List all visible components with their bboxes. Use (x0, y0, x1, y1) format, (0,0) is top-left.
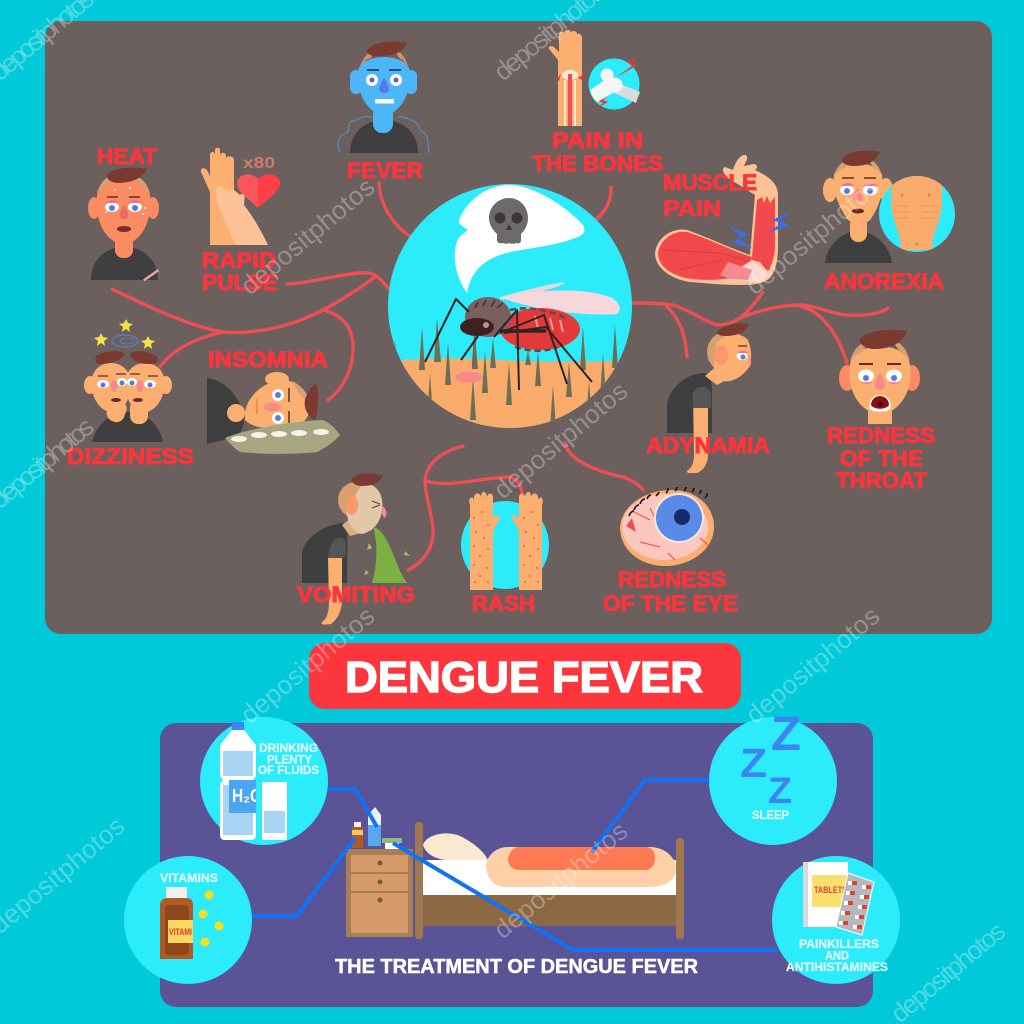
watermark text: depositphotos (488, 376, 633, 505)
label: ANOREXIA (824, 269, 944, 294)
bent figure (302, 473, 386, 625)
connector lines (252, 780, 777, 950)
circle: drinking fluids (200, 717, 328, 845)
label: ADYNAMIA (646, 433, 770, 458)
panel: treatment (124, 708, 900, 1007)
hands (201, 148, 268, 245)
arm with bone (549, 30, 585, 126)
caption: PLENTY (267, 754, 312, 766)
bed and nightstand (346, 807, 684, 939)
label: MUSCLE (663, 170, 757, 195)
water bottle: H₂O (232, 786, 262, 806)
caption: ANTIHISTAMINES (786, 962, 888, 974)
label: THE BONES (532, 151, 663, 176)
label: DIZZINESS (67, 444, 194, 469)
treatment heading: THE TREATMENT OF DENGUE FEVER (335, 956, 699, 978)
circle: vitamins (124, 856, 252, 984)
thin figure (823, 151, 893, 263)
title banner: DENGUE FEVER (345, 653, 703, 702)
symptom: vomiting (297, 473, 415, 625)
slumped figure (667, 323, 751, 473)
watermark text: depositphotos (488, 816, 633, 945)
caption: DRINKING (259, 743, 318, 755)
symptom: adynamia (646, 323, 770, 473)
symptom: dizziness (67, 319, 194, 469)
label: THROAT (836, 468, 928, 493)
label: PAIN (663, 196, 721, 221)
label: INSOMNIA (208, 347, 328, 372)
label: OF THE EYE (603, 591, 738, 616)
label (603, 567, 738, 616)
torso inset (879, 176, 955, 252)
symptom: anorexia (823, 151, 955, 294)
symptom: redness of the eye (603, 487, 738, 616)
panel: symptoms (45, 21, 992, 634)
watermark text: depositphotos (740, 172, 885, 301)
caption (258, 743, 319, 777)
icon: heart (237, 174, 280, 208)
blister pack (836, 873, 874, 935)
watermark text: depositphotos (235, 172, 380, 301)
caption: AND (825, 950, 849, 962)
symptom: rapid pulse (201, 148, 280, 295)
glass (262, 782, 287, 840)
watermark text: depositphotos (235, 601, 380, 730)
label (827, 423, 935, 493)
caption: OF FLUIDS (258, 765, 319, 777)
watermark text: depositphotos (740, 601, 885, 730)
hands with rash (461, 492, 549, 590)
label (202, 248, 278, 295)
zzz: Z (768, 770, 792, 811)
label: HEAT (97, 144, 158, 169)
bloodshot eye (620, 487, 714, 566)
label: PAIN IN (552, 128, 643, 153)
symptom: fever (338, 42, 429, 183)
mosquito illustration (388, 184, 632, 428)
caption: SLEEP (752, 810, 789, 822)
symptom: redness of the throat (827, 330, 935, 493)
symptom: pain in the bones (532, 30, 663, 176)
caption: VITAMINS (160, 873, 218, 885)
title banner (309, 643, 741, 709)
mosquito (425, 282, 620, 390)
connector lines (112, 183, 888, 570)
circle: painkillers (772, 856, 900, 984)
symptom: muscle pain (655, 155, 792, 285)
label: VOMITING (297, 582, 415, 607)
caption (786, 939, 888, 974)
lying figure (207, 372, 340, 454)
label: FEVER (347, 158, 423, 183)
label (532, 128, 663, 176)
speech blob with skull (455, 185, 584, 293)
x80: x80 (243, 155, 275, 172)
heat figure (88, 168, 159, 281)
double face figure (84, 351, 172, 442)
label: REDNESS (827, 423, 935, 448)
vomit (364, 527, 410, 583)
symptom: insomnia (207, 347, 340, 454)
caption: PAINKILLERS (799, 939, 879, 951)
symptom: rash (461, 492, 549, 616)
label: RASH (472, 591, 535, 616)
pills (198, 890, 224, 946)
flexed arm (655, 155, 792, 285)
label: OF THE (840, 446, 923, 471)
stars and swirl (94, 319, 155, 349)
label: RAPID (202, 248, 276, 273)
zzz: Z (771, 708, 801, 761)
zzz (740, 708, 801, 811)
label: REDNESS (618, 567, 726, 592)
tablets box: TABLETS (814, 885, 847, 895)
label: PULSE (202, 270, 278, 295)
blue face figure (338, 42, 429, 153)
circle: sleep (709, 708, 837, 845)
label (663, 170, 757, 221)
icon: bone (588, 56, 640, 110)
symptom: heat (88, 144, 159, 281)
open mouth face (839, 330, 920, 424)
vitamin jar: VITAMI (169, 927, 192, 937)
zzz: Z (740, 740, 767, 786)
